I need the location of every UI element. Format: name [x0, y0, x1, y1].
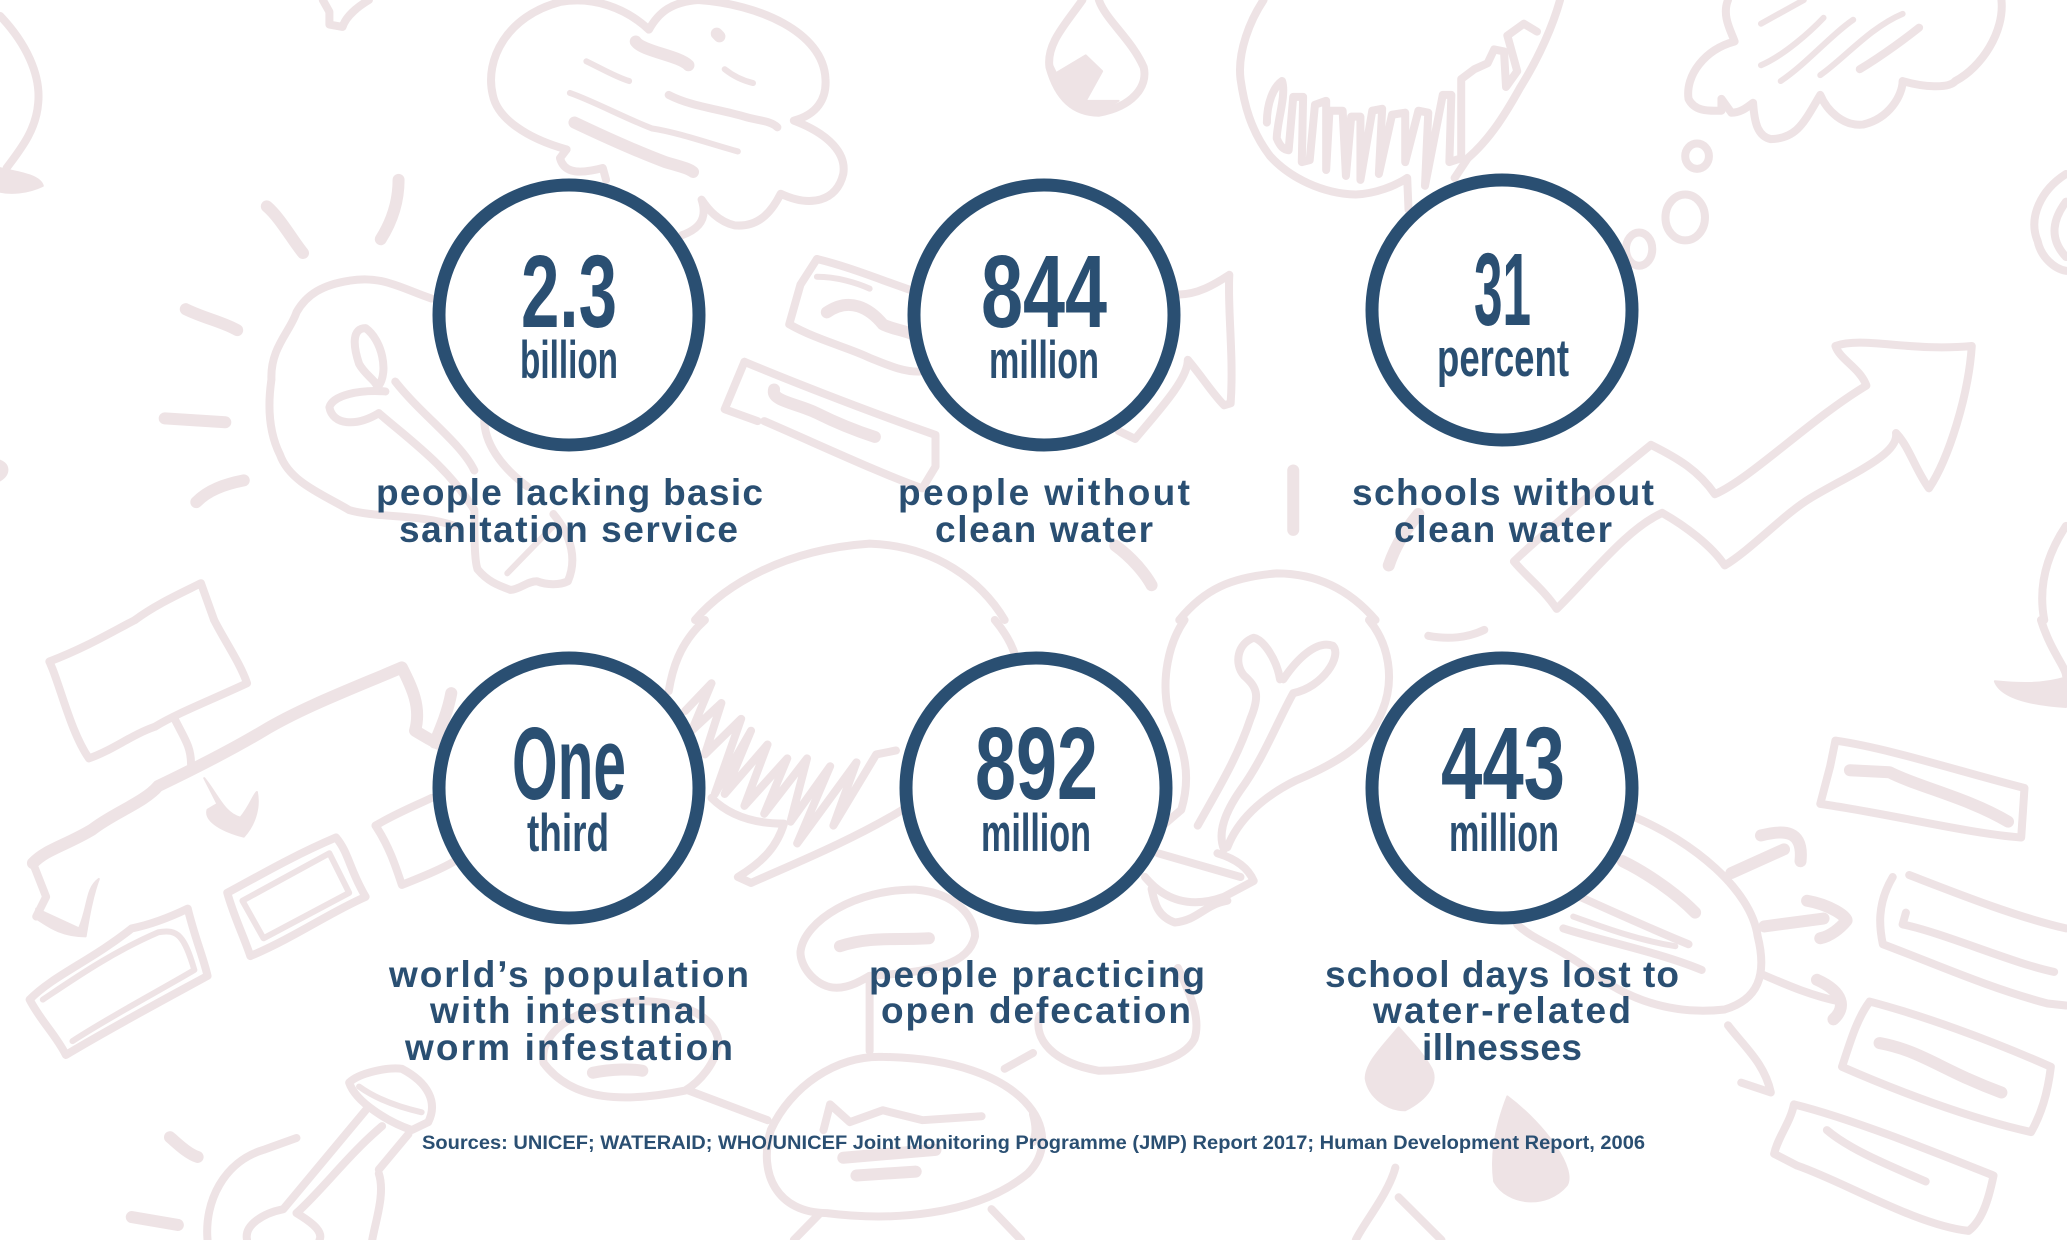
stat: 31 percent: 31	[1474, 232, 1531, 347]
stat: 443 million: 443	[1441, 706, 1565, 821]
label: schools: clean water	[1394, 509, 1612, 550]
label: clean water	[898, 472, 1190, 550]
stat: 2.3 billion: billion	[520, 331, 618, 390]
label: sanitation: people lacking basic	[376, 472, 763, 513]
label: sanitation	[376, 472, 763, 550]
stat: 892 million: 892	[975, 706, 1098, 821]
label: worms: worm infestation	[404, 1027, 733, 1068]
doodle: water drops	[1033, 968, 1569, 1240]
doodles: bottom left quadrant	[30, 620, 1042, 1240]
doodle: thought cloud with bubbles	[1626, 0, 2002, 266]
doodles: bottom right quadrant	[1033, 620, 2066, 1240]
doodle: upper note rectangle	[789, 259, 919, 372]
doodle: arc pieces	[135, 544, 1005, 620]
doodle: right edge shape	[1995, 620, 2066, 707]
doodle: fringed bulb centre	[669, 620, 1015, 883]
doodle: left edge balloon	[0, 0, 369, 480]
label: worms: with intestinal	[429, 990, 707, 1031]
label: sanitation: sanitation service	[399, 509, 738, 550]
doodle: light bulb with rays	[165, 180, 572, 590]
label: clean water: people without	[898, 472, 1190, 513]
doodle: sign board	[49, 620, 247, 764]
label: worms: world’s population	[388, 954, 749, 995]
doodle: mind map bubbles	[543, 890, 1042, 1240]
doodle: rising arrow	[1514, 343, 1972, 609]
stat: 31 percent: percent	[1437, 329, 1569, 388]
doodle: long bent arrow	[33, 667, 451, 936]
label: clean water: clean water	[935, 509, 1153, 550]
stat: 31 percent	[1352, 180, 1654, 550]
doodle: short strokes	[1115, 471, 1418, 620]
doodle: lower note rectangle	[725, 362, 935, 488]
stat: 892 million	[869, 658, 1205, 1031]
stat: 443 million: million	[1449, 804, 1559, 863]
stat: 844 million: million	[989, 331, 1099, 390]
doodle: bottom left bulb	[132, 1068, 432, 1240]
stat: 2.3 billion: 2.3	[521, 234, 617, 349]
label: school days	[1325, 954, 1679, 1068]
label: schools	[1352, 472, 1654, 550]
stat: 443 million	[1325, 658, 1679, 1068]
stat: One third: third	[527, 804, 609, 863]
doodles: top left quadrant	[0, 0, 1005, 620]
doodle: fringed bulb	[1240, 0, 1560, 210]
doodle: cloud	[491, 0, 844, 235]
label: defecation: open defecation	[881, 990, 1191, 1031]
doodle: water drop	[1049, 0, 1144, 113]
stat: 2.3 billion	[376, 185, 763, 550]
doodle: small arrow behind second circle	[1119, 275, 1232, 439]
label: schools: schools without	[1352, 472, 1654, 513]
stat: 892 million: million	[981, 804, 1091, 863]
doodles: top right quadrant	[1049, 0, 2066, 620]
doodle: rectangles	[30, 798, 455, 1055]
label: school days: water-related	[1372, 990, 1631, 1031]
sources line: Sources: UNICEF; WATERAID; WHO/UNICEF Joint Monitoring Programme (JMP) Report 2017; Human Development Report, 2006	[422, 1133, 1645, 1154]
doodle: oval with arrows	[1517, 818, 1847, 1093]
label: defecation	[869, 954, 1205, 1031]
stat: One third	[388, 658, 749, 1068]
stat: 844 million	[898, 185, 1190, 550]
stat: One third: One	[512, 706, 626, 821]
doodle: large bulb with filament	[1145, 620, 1484, 922]
stat: 844 million: 844	[981, 234, 1107, 349]
label: defecation: people practicing	[869, 954, 1205, 995]
label: school days: school days lost to	[1325, 954, 1679, 995]
doodle: right edge shape	[2034, 174, 2066, 620]
label: worms	[388, 954, 749, 1068]
doodle: note rectangles right	[1774, 741, 2066, 1231]
label: school days: illnesses	[1422, 1027, 1582, 1068]
